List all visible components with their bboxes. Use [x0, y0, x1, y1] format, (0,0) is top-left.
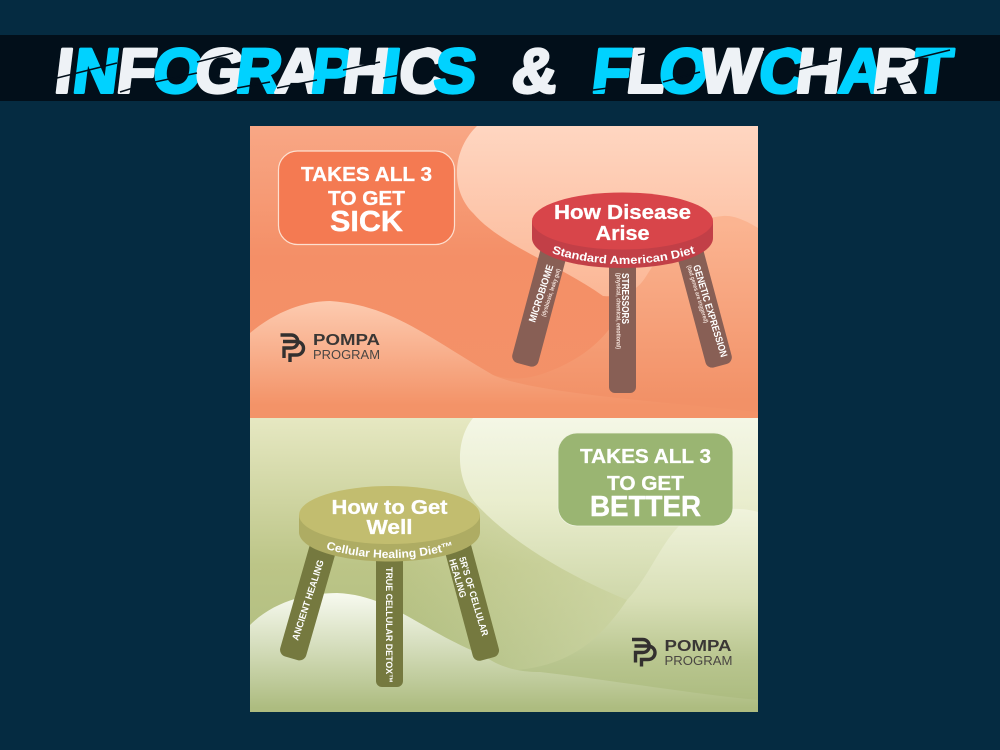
title text: F: [113, 37, 160, 106]
leg: stressors: (physical, chemical, emotional): [614, 273, 620, 349]
logo: pompa program: PROGRAM: [664, 654, 732, 668]
callout: takes all 3 to get sick: [278, 151, 454, 244]
callout: takes all 3 to get better: BETTER: [590, 491, 701, 523]
title text: T: [909, 37, 956, 106]
title text: S: [430, 37, 481, 106]
leg: stressors: STRESSORS: [619, 273, 630, 324]
callout: takes all 3 to get sick: TAKES ALL 3: [301, 163, 432, 186]
leg: microbiome: MICROBIOME: [527, 263, 556, 324]
leg: true cellular detox: TRUE CELLULAR DETOX™: [383, 567, 394, 683]
logo: pompa program: PROGRAM: [313, 348, 380, 362]
title text: &: [508, 37, 562, 106]
title text: W: [696, 37, 765, 106]
leg: genetic expression: GENETIC EXPRESSION: [690, 264, 729, 359]
title text: O: [655, 37, 713, 106]
seat label: how to get well: How to Get: [332, 497, 448, 519]
callout: takes all 3 to get sick: SICK: [330, 206, 403, 238]
callout: takes all 3 to get better: TO GET: [607, 472, 684, 495]
leg: 5R's of cellular healing: HEALING: [446, 558, 468, 599]
title text: L: [623, 37, 670, 106]
stool: how disease arise: [512, 192, 732, 393]
leg: stressors: [609, 268, 636, 393]
leg: 5R's of cellular healing: [446, 545, 499, 661]
title text: I: [51, 37, 77, 106]
leg: genetic expression: [678, 252, 732, 368]
panel: how disease arises: [250, 126, 758, 418]
seat label: how disease arise: How Disease: [554, 202, 691, 224]
curved label: standard american diet: Standard American Diet: [552, 246, 696, 264]
title text: I: [378, 37, 404, 106]
title text: G: [191, 37, 249, 106]
logo: pompa program: [280, 332, 381, 362]
leg: microbiome: (dysbiosis, leaky gut): [541, 268, 562, 318]
title banner: [0, 35, 1000, 106]
callout: takes all 3 to get better: [558, 433, 733, 526]
stool: how disease arise: Arise: [596, 223, 650, 245]
stool: how to get well: Well: [366, 517, 412, 539]
title text: R: [869, 37, 923, 106]
title text: H: [339, 37, 393, 106]
title text: F: [588, 37, 635, 106]
callout: takes all 3 to get better: TAKES ALL 3: [580, 445, 711, 468]
title text: H: [792, 37, 846, 106]
curved label: cellular healing diet: Cellular Healing Diet™: [327, 542, 452, 560]
leg: genetic expression: (bad genes are triggered): [685, 265, 708, 324]
title text: C: [395, 37, 449, 106]
title text: A: [835, 37, 889, 106]
leg: ancient healing: [280, 546, 335, 660]
callout: takes all 3 to get sick: TO GET: [328, 187, 405, 210]
leg: ancient healing: ANCIENT HEALING: [290, 559, 327, 642]
logo: pompa program: [632, 638, 732, 668]
title text: A: [272, 37, 326, 106]
title text: N: [69, 37, 123, 106]
title text: O: [149, 37, 207, 106]
title text: C: [755, 37, 809, 106]
title text: P: [307, 37, 358, 106]
panel: how to get well: [250, 418, 758, 712]
title text: R: [232, 37, 286, 106]
leg: microbiome: [512, 250, 566, 367]
leg: 5R's of cellular healing: 5R'S OF CELLULAR: [456, 556, 490, 638]
leg: true cellular detox: [376, 561, 403, 687]
logo: pompa program: POMPA: [313, 332, 381, 349]
logo: pompa program: POMPA: [664, 638, 732, 655]
stool: how to get well: [280, 486, 499, 687]
